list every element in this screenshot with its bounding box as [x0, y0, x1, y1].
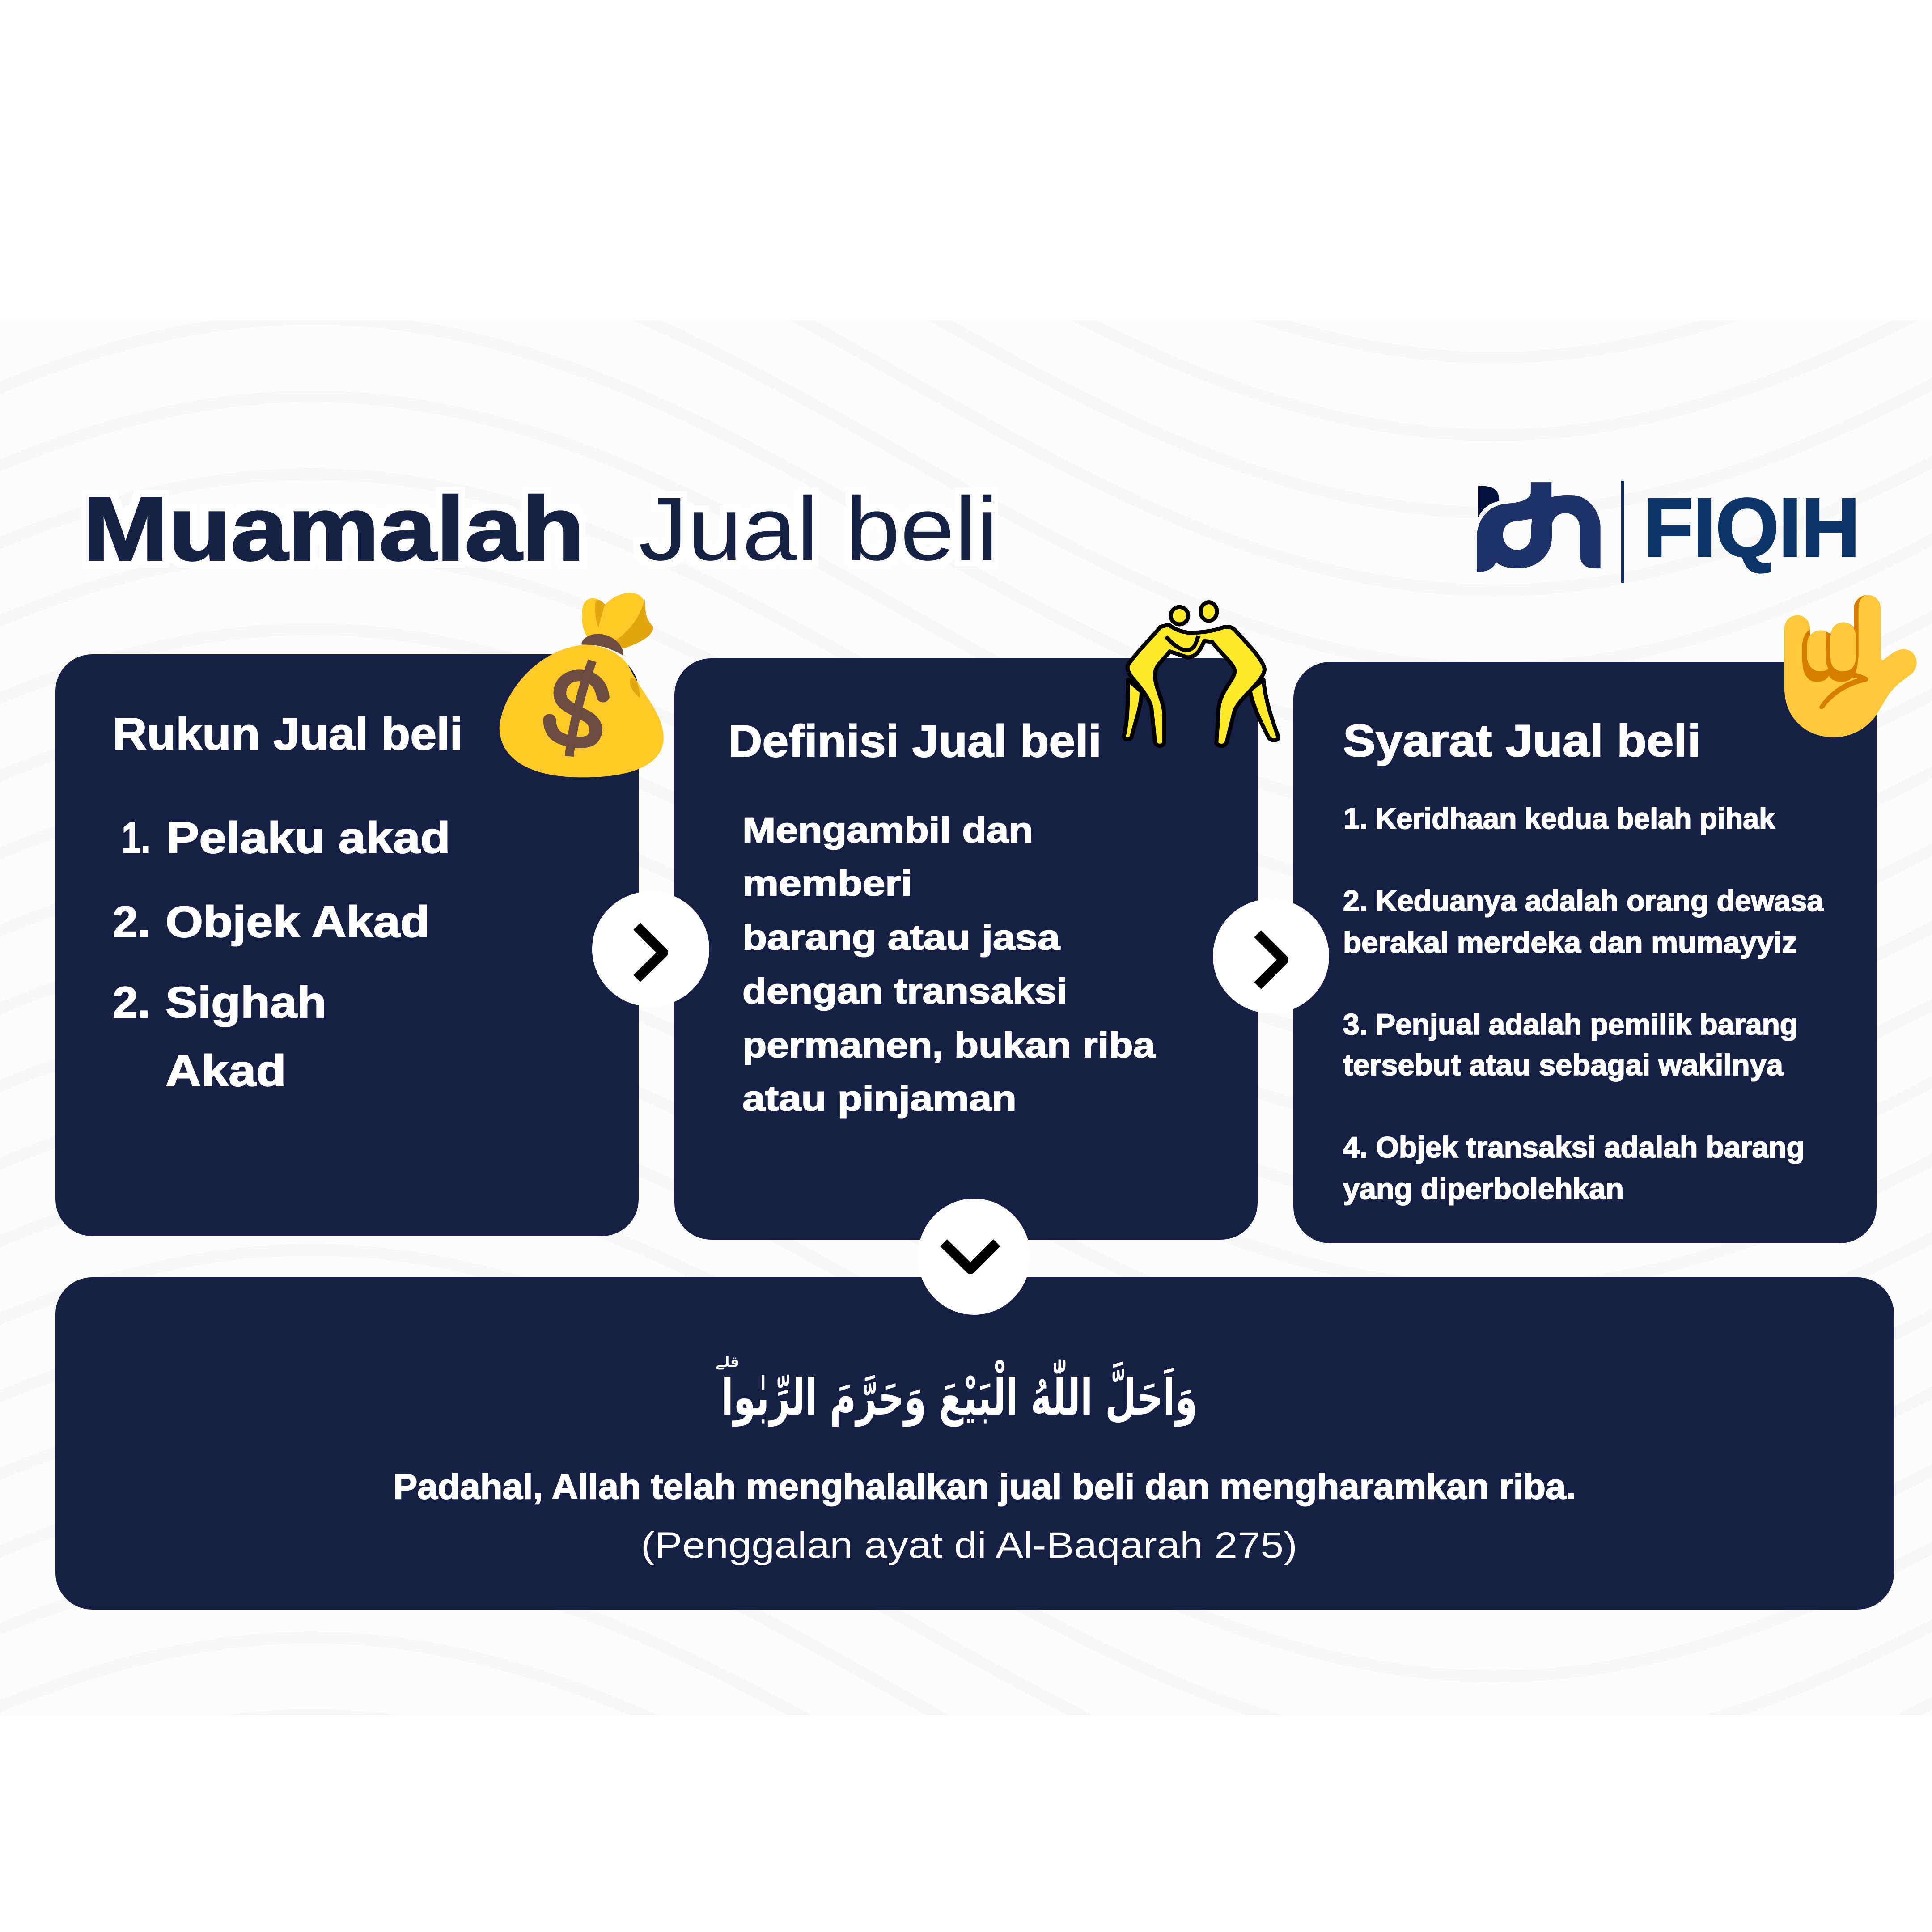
text block: definisi: Mengambil dan	[742, 810, 1033, 850]
logo: idn fiqih: FIQIH	[1644, 482, 1860, 574]
icon: wrestlers	[1124, 602, 1278, 746]
list: rukun items: Sighah	[165, 978, 326, 1027]
text block: definisi: memberi	[742, 863, 912, 903]
waqf mark: قلے	[716, 1353, 739, 1370]
arrow: rukun to definisi	[592, 891, 709, 1007]
list: syarat items: 2. Keduanya adalah orang dewasa	[1343, 884, 1824, 917]
list: rukun items: Pelaku akad	[166, 813, 450, 862]
panel: rukun jual beli	[55, 654, 639, 1236]
list: syarat items: berakal merdeka dan mumayyiz	[1343, 926, 1797, 959]
wavy background band	[0, 320, 1932, 1715]
text block: definisi: atau pinjaman	[742, 1078, 1017, 1118]
text block: definisi: dengan transaksi	[742, 971, 1068, 1011]
panel: syarat jual beli	[1293, 662, 1877, 1243]
list: syarat items: tersebut atau sebagai wakilnya	[1343, 1048, 1784, 1081]
title: Jual beli	[639, 478, 998, 579]
list: syarat items: yang diperbolehkan	[1343, 1172, 1624, 1205]
heading: definisi: Definisi Jual beli	[728, 716, 1102, 767]
list: syarat items: 3. Penjual adalah pemilik barang	[1343, 1008, 1798, 1041]
title	[83, 478, 998, 579]
translation: Padahal, Allah telah menghalalkan jual beli dan mengharamkan riba.	[393, 1466, 1576, 1506]
text block: definisi: barang atau jasa	[742, 917, 1060, 957]
logo: idn fiqih	[1477, 481, 1860, 583]
arrow: definisi to syarat	[1213, 899, 1329, 1013]
heading: syarat: Syarat Jual beli	[1343, 716, 1701, 766]
heading: rukun: Rukun Jual beli	[113, 709, 463, 759]
list: rukun items: 2.	[113, 978, 150, 1027]
panel: definisi jual beli	[674, 658, 1258, 1240]
panel: ayat al-baqarah	[55, 1277, 1894, 1610]
arabic verse: وَاَحَلَّ اللّٰهُ الْبَيْعَ وَحَرَّمَ الرِّبٰوا	[721, 1359, 1198, 1427]
list: rukun items: 1.	[122, 813, 151, 862]
list: rukun items: 2.	[113, 897, 150, 946]
title: Muamalah	[83, 478, 585, 579]
list: syarat items	[1343, 802, 1824, 1205]
text block: definisi: permanen, bukan riba	[742, 1025, 1156, 1065]
list: rukun items: Akad	[165, 1046, 286, 1095]
source reference: (Penggalan ayat di Al-Baqarah 275)	[641, 1525, 1297, 1566]
list: syarat items: 4. Objek transaksi adalah barang	[1343, 1131, 1805, 1164]
list: rukun items: Objek Akad	[165, 897, 430, 946]
list: syarat items: 1. Keridhaan kedua belah pihak	[1343, 802, 1775, 835]
arrow: down to verse	[918, 1199, 1030, 1315]
list: rukun items	[113, 813, 450, 1095]
text block: definisi	[742, 810, 1156, 1118]
icon: money bag	[500, 593, 664, 777]
icon: hand sign	[1784, 595, 1917, 737]
